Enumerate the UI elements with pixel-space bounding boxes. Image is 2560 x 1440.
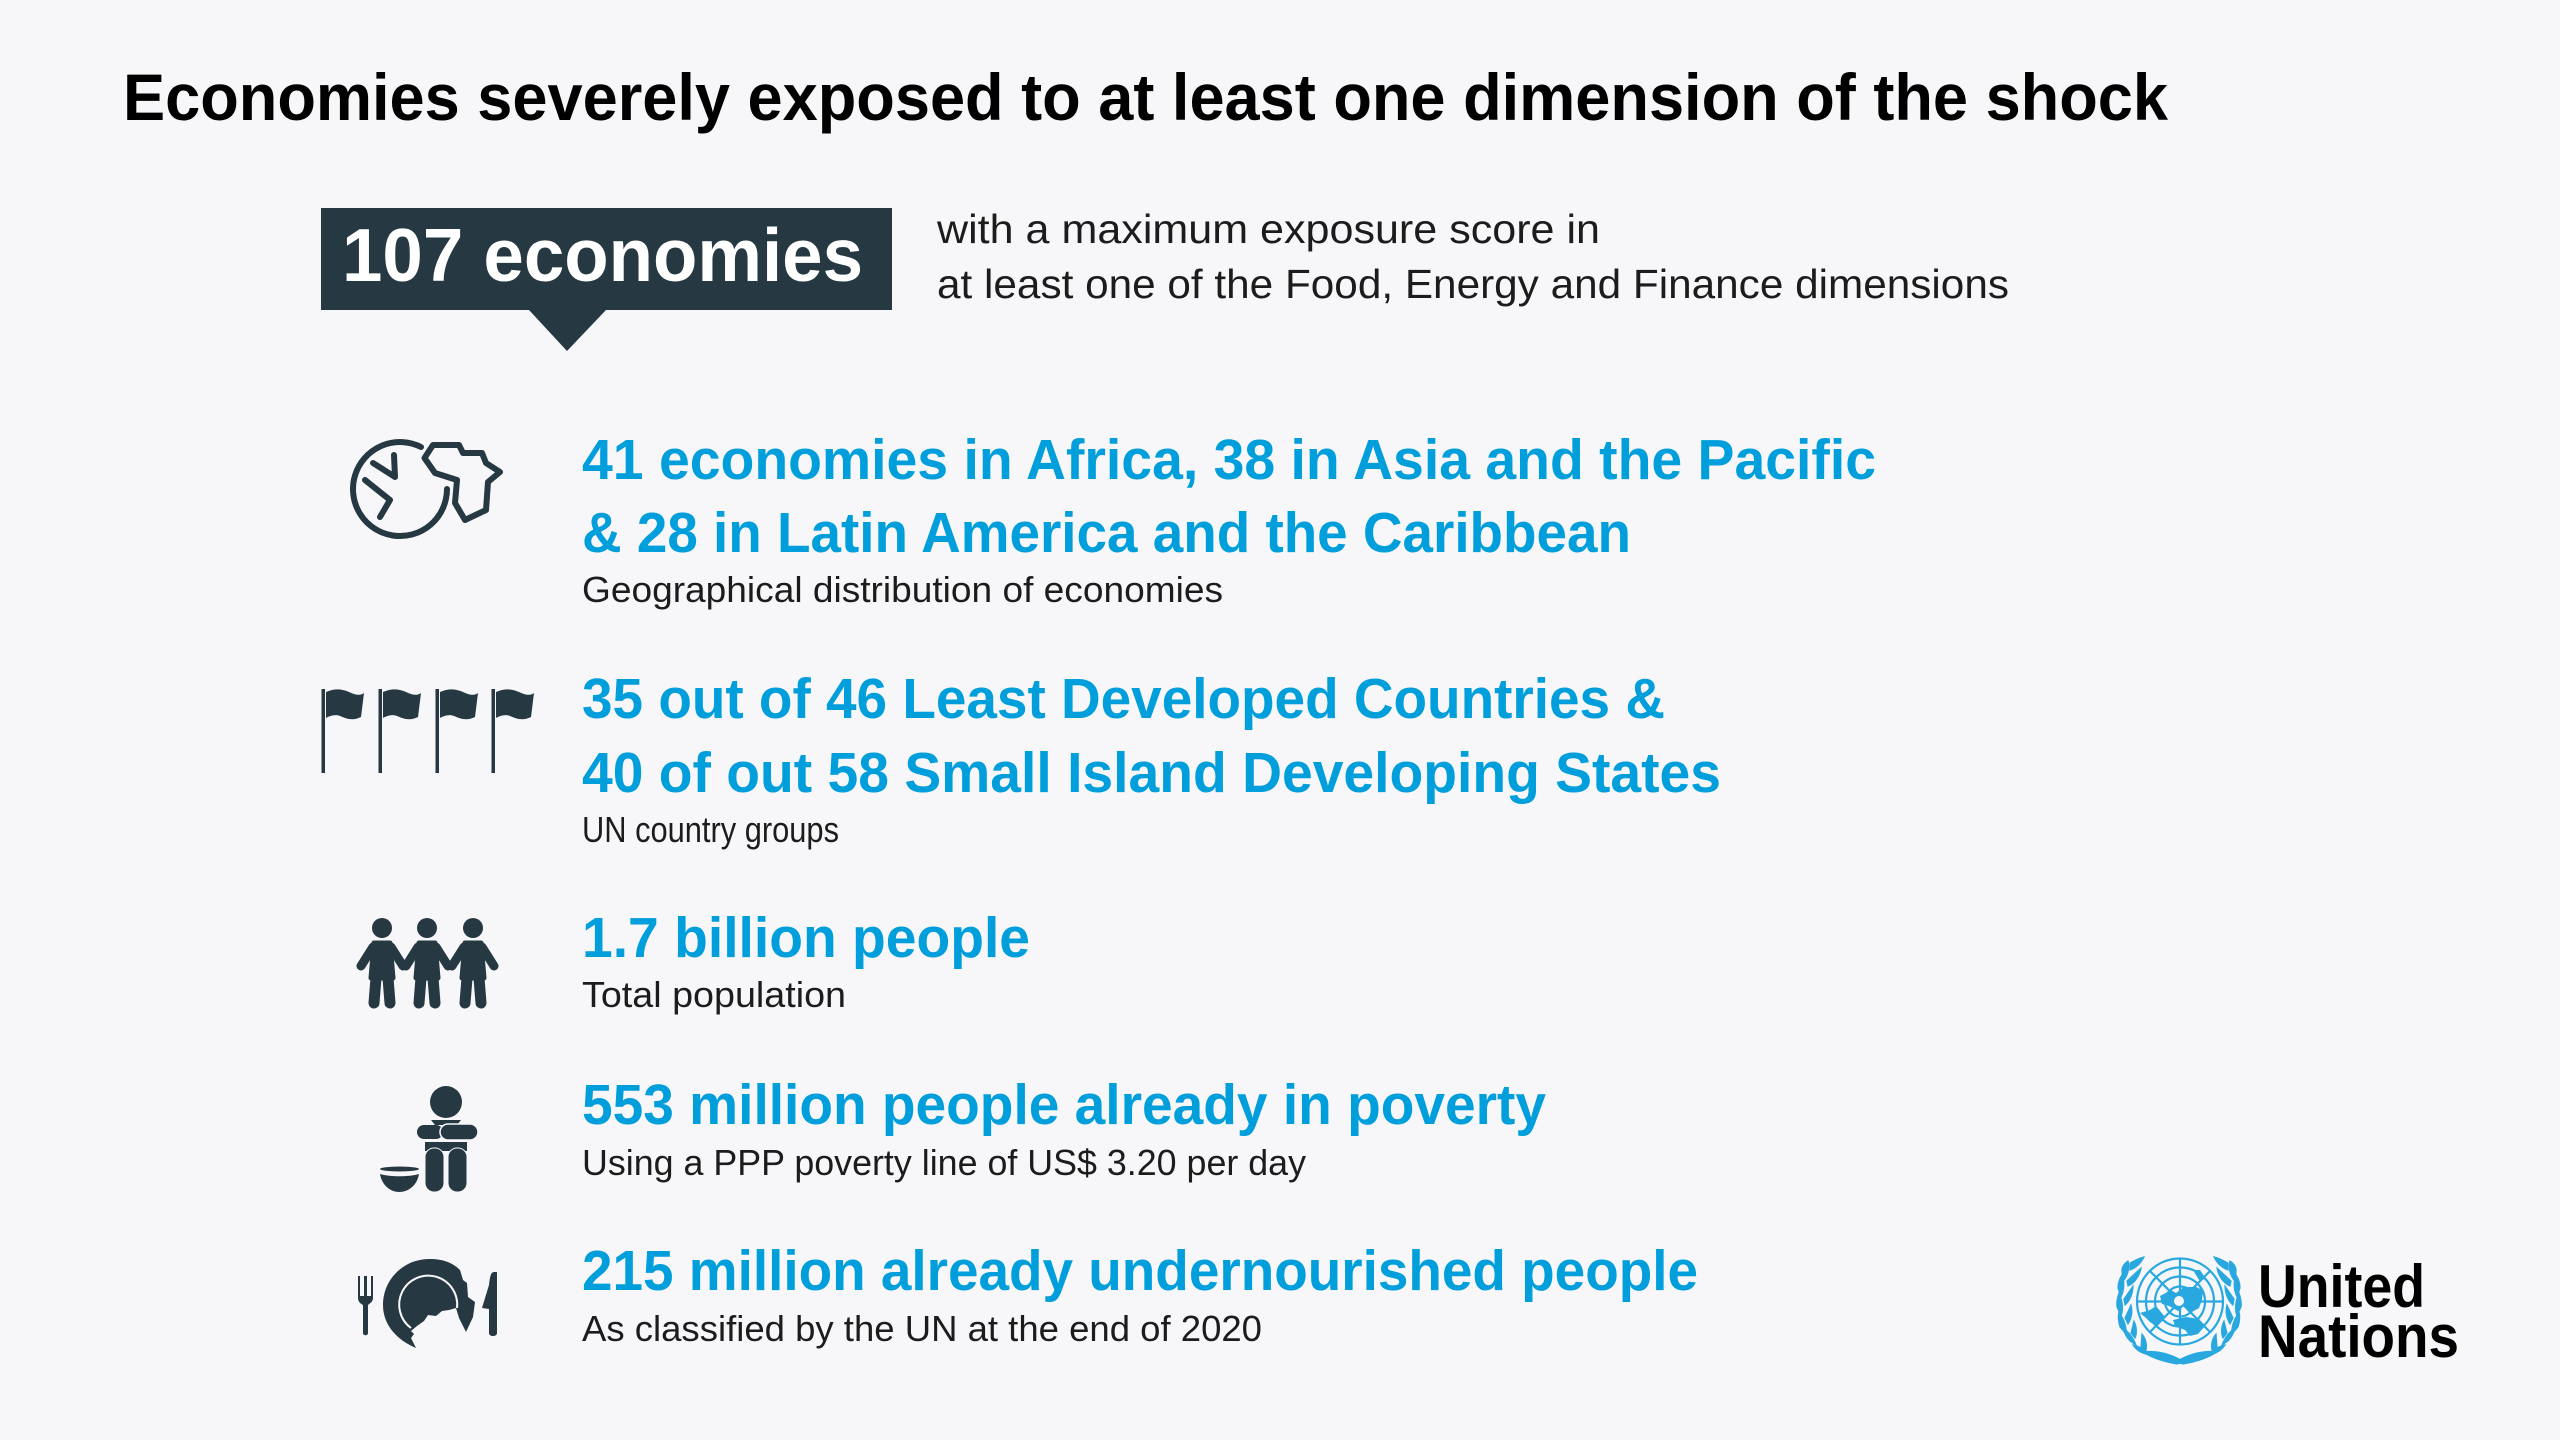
row 1: geography: & 28 in Latin America and the Caribbean	[582, 501, 1631, 565]
callout: 107 economies	[321, 208, 892, 351]
row 2: country groups: 35 out of 46 Least Developed Countries &	[582, 667, 1665, 731]
title: Economies severely exposed to at least one dimension of the shock	[123, 60, 2168, 134]
row 4: poverty	[582, 1073, 1546, 1183]
row 4: poverty: Using a PPP poverty line of US$ 3.20 per day	[582, 1142, 1306, 1183]
row 1: geography	[582, 428, 1876, 610]
row 4: poverty: 553 million people already in poverty	[582, 1073, 1546, 1137]
callout: 107 economies: 107 economies	[342, 213, 863, 297]
row 3: population: Total population	[582, 974, 846, 1015]
emblem: globe and olive wreath	[2117, 1257, 2241, 1364]
icon: bitten plate with fork and knife	[358, 1259, 497, 1348]
row 1: geography: Geographical distribution of economies	[582, 569, 1223, 610]
row 5: undernourishment	[582, 1239, 1698, 1349]
intro text	[936, 206, 2009, 307]
logo: United Nations	[2117, 1253, 2459, 1370]
icon: globe and Africa	[353, 442, 500, 536]
row 5: undernourishment: As classified by the UN at the end of 2020	[582, 1308, 1262, 1349]
row 2: country groups	[582, 667, 1721, 850]
intro text: at least one of the Food, Energy and Finance dimensions	[937, 261, 2009, 307]
row 2: country groups: UN country groups	[582, 809, 839, 850]
icon: person in poverty with bowl	[380, 1086, 478, 1192]
icon: four flags	[322, 689, 534, 773]
row 2: country groups: 40 of out 58 Small Island Developing States	[582, 741, 1721, 805]
row 3: population: 1.7 billion people	[582, 906, 1030, 970]
wordmark: Nations	[2258, 1303, 2459, 1370]
wordmark	[2258, 1253, 2459, 1370]
icon: three people	[361, 918, 494, 1003]
row 5: undernourishment: 215 million already undernourished people	[582, 1239, 1698, 1303]
wordmark: United	[2258, 1253, 2425, 1320]
row 3: population	[582, 906, 1030, 1015]
intro text: with a maximum exposure score in	[936, 206, 1600, 252]
row 1: geography: 41 economies in Africa, 38 in Asia and the Pacific	[582, 428, 1876, 492]
